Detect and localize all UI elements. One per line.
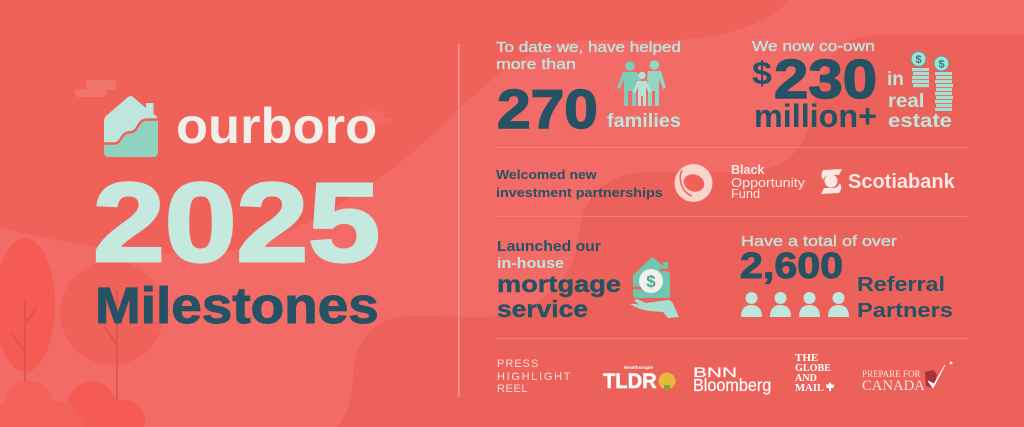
icon: coin stacks: $ xyxy=(915,54,922,66)
logo: TLDR xyxy=(603,365,676,393)
text: partnerships: Welcomed new xyxy=(496,167,597,182)
panel: families helped: more than xyxy=(496,56,576,73)
icon: family xyxy=(617,60,666,106)
text: million+: million+ xyxy=(754,98,877,134)
logo: TLDR: Wealthsimple xyxy=(624,365,653,370)
logo: BNN Bloomberg xyxy=(693,364,771,395)
icon: house in hand: $ xyxy=(646,272,656,291)
panel: families helped xyxy=(496,40,681,140)
panel: referral partners: Partners xyxy=(857,299,953,322)
logo: Prepare for Canada xyxy=(862,362,952,394)
text: total: Have a total of over xyxy=(741,234,898,250)
panel: press highlight reel xyxy=(497,352,952,395)
text: Black Opportunity Fund: Black xyxy=(731,163,764,177)
vertical divider xyxy=(458,44,460,397)
text: co-own intro: We now co-own xyxy=(752,39,875,55)
panel: mortgage service: service xyxy=(497,297,588,323)
icon: coin stacks xyxy=(911,52,953,111)
icon: people row xyxy=(741,292,849,317)
logo: The Globe and Mail: THE xyxy=(795,352,818,364)
number: 270: 270 xyxy=(497,79,598,140)
logo: Prepare for Canada: PREPARE FOR xyxy=(862,369,920,379)
text: in real estate: real xyxy=(888,91,924,112)
logo: The Globe and Mail xyxy=(795,352,834,394)
text: helped intro: To date we, have helped xyxy=(496,40,681,56)
divider xyxy=(496,216,969,217)
text: Black Opportunity Fund: Fund xyxy=(731,187,760,201)
logo: The Globe and Mail: GLOBE xyxy=(795,363,831,374)
text: in real estate: estate xyxy=(888,110,952,132)
icon: ourboro house logo xyxy=(104,96,158,157)
text: press heading: HIGHLIGHT xyxy=(497,371,572,383)
number: $230: 230 xyxy=(774,49,877,110)
text: Black Opportunity Fund: Opportunity xyxy=(731,176,805,190)
text: in real estate xyxy=(887,69,952,132)
text: Black Opportunity Fund xyxy=(731,163,805,201)
decorative clouds xyxy=(75,80,391,124)
logo: BNN Bloomberg: BNN xyxy=(693,364,737,380)
illustration: trees and bushes xyxy=(0,238,164,427)
title: 2025: 2025 xyxy=(93,160,380,285)
logo: The Globe and Mail: AND xyxy=(795,373,817,384)
text: referral partners: Referral xyxy=(857,273,945,296)
number: 2,600: 2,600 xyxy=(740,246,843,286)
text: press heading: REEL xyxy=(497,383,528,395)
text: in real estate: in xyxy=(887,69,904,90)
panel: mortgage service: mortgage xyxy=(497,272,621,297)
icon: Scotiabank logo xyxy=(821,169,842,194)
panel: mortgage service: in-house xyxy=(497,256,564,272)
text: press heading: PRESS xyxy=(497,358,539,370)
logo wordmark: ourboro xyxy=(176,98,377,154)
text: launched: Launched our xyxy=(497,239,601,255)
text: families: families xyxy=(607,110,681,132)
title: Milestones: Milestones xyxy=(95,278,379,335)
panel: real estate co-owned xyxy=(752,39,953,134)
icon: house in hand xyxy=(630,258,679,318)
panel: investment partnerships xyxy=(496,163,956,202)
number: $230: $ xyxy=(752,56,772,92)
divider xyxy=(496,147,969,148)
icon: Black Opportunity Fund logo xyxy=(674,164,712,202)
text: Scotiabank: Scotiabank xyxy=(848,171,956,193)
logo: BNN Bloomberg: Bloomberg xyxy=(693,375,771,395)
panel: investment partnerships: investment partnerships xyxy=(496,186,663,200)
text: press heading xyxy=(497,358,572,395)
logo: TLDR: TLDR xyxy=(603,370,657,393)
panel: mortgage service xyxy=(497,239,679,323)
icon: coin stacks: $ xyxy=(938,58,945,70)
divider xyxy=(496,338,969,339)
logo: The Globe and Mail: MAIL xyxy=(795,382,824,394)
panel: referral partners xyxy=(740,234,953,322)
logo: Prepare for Canada: CANADA xyxy=(862,378,925,394)
